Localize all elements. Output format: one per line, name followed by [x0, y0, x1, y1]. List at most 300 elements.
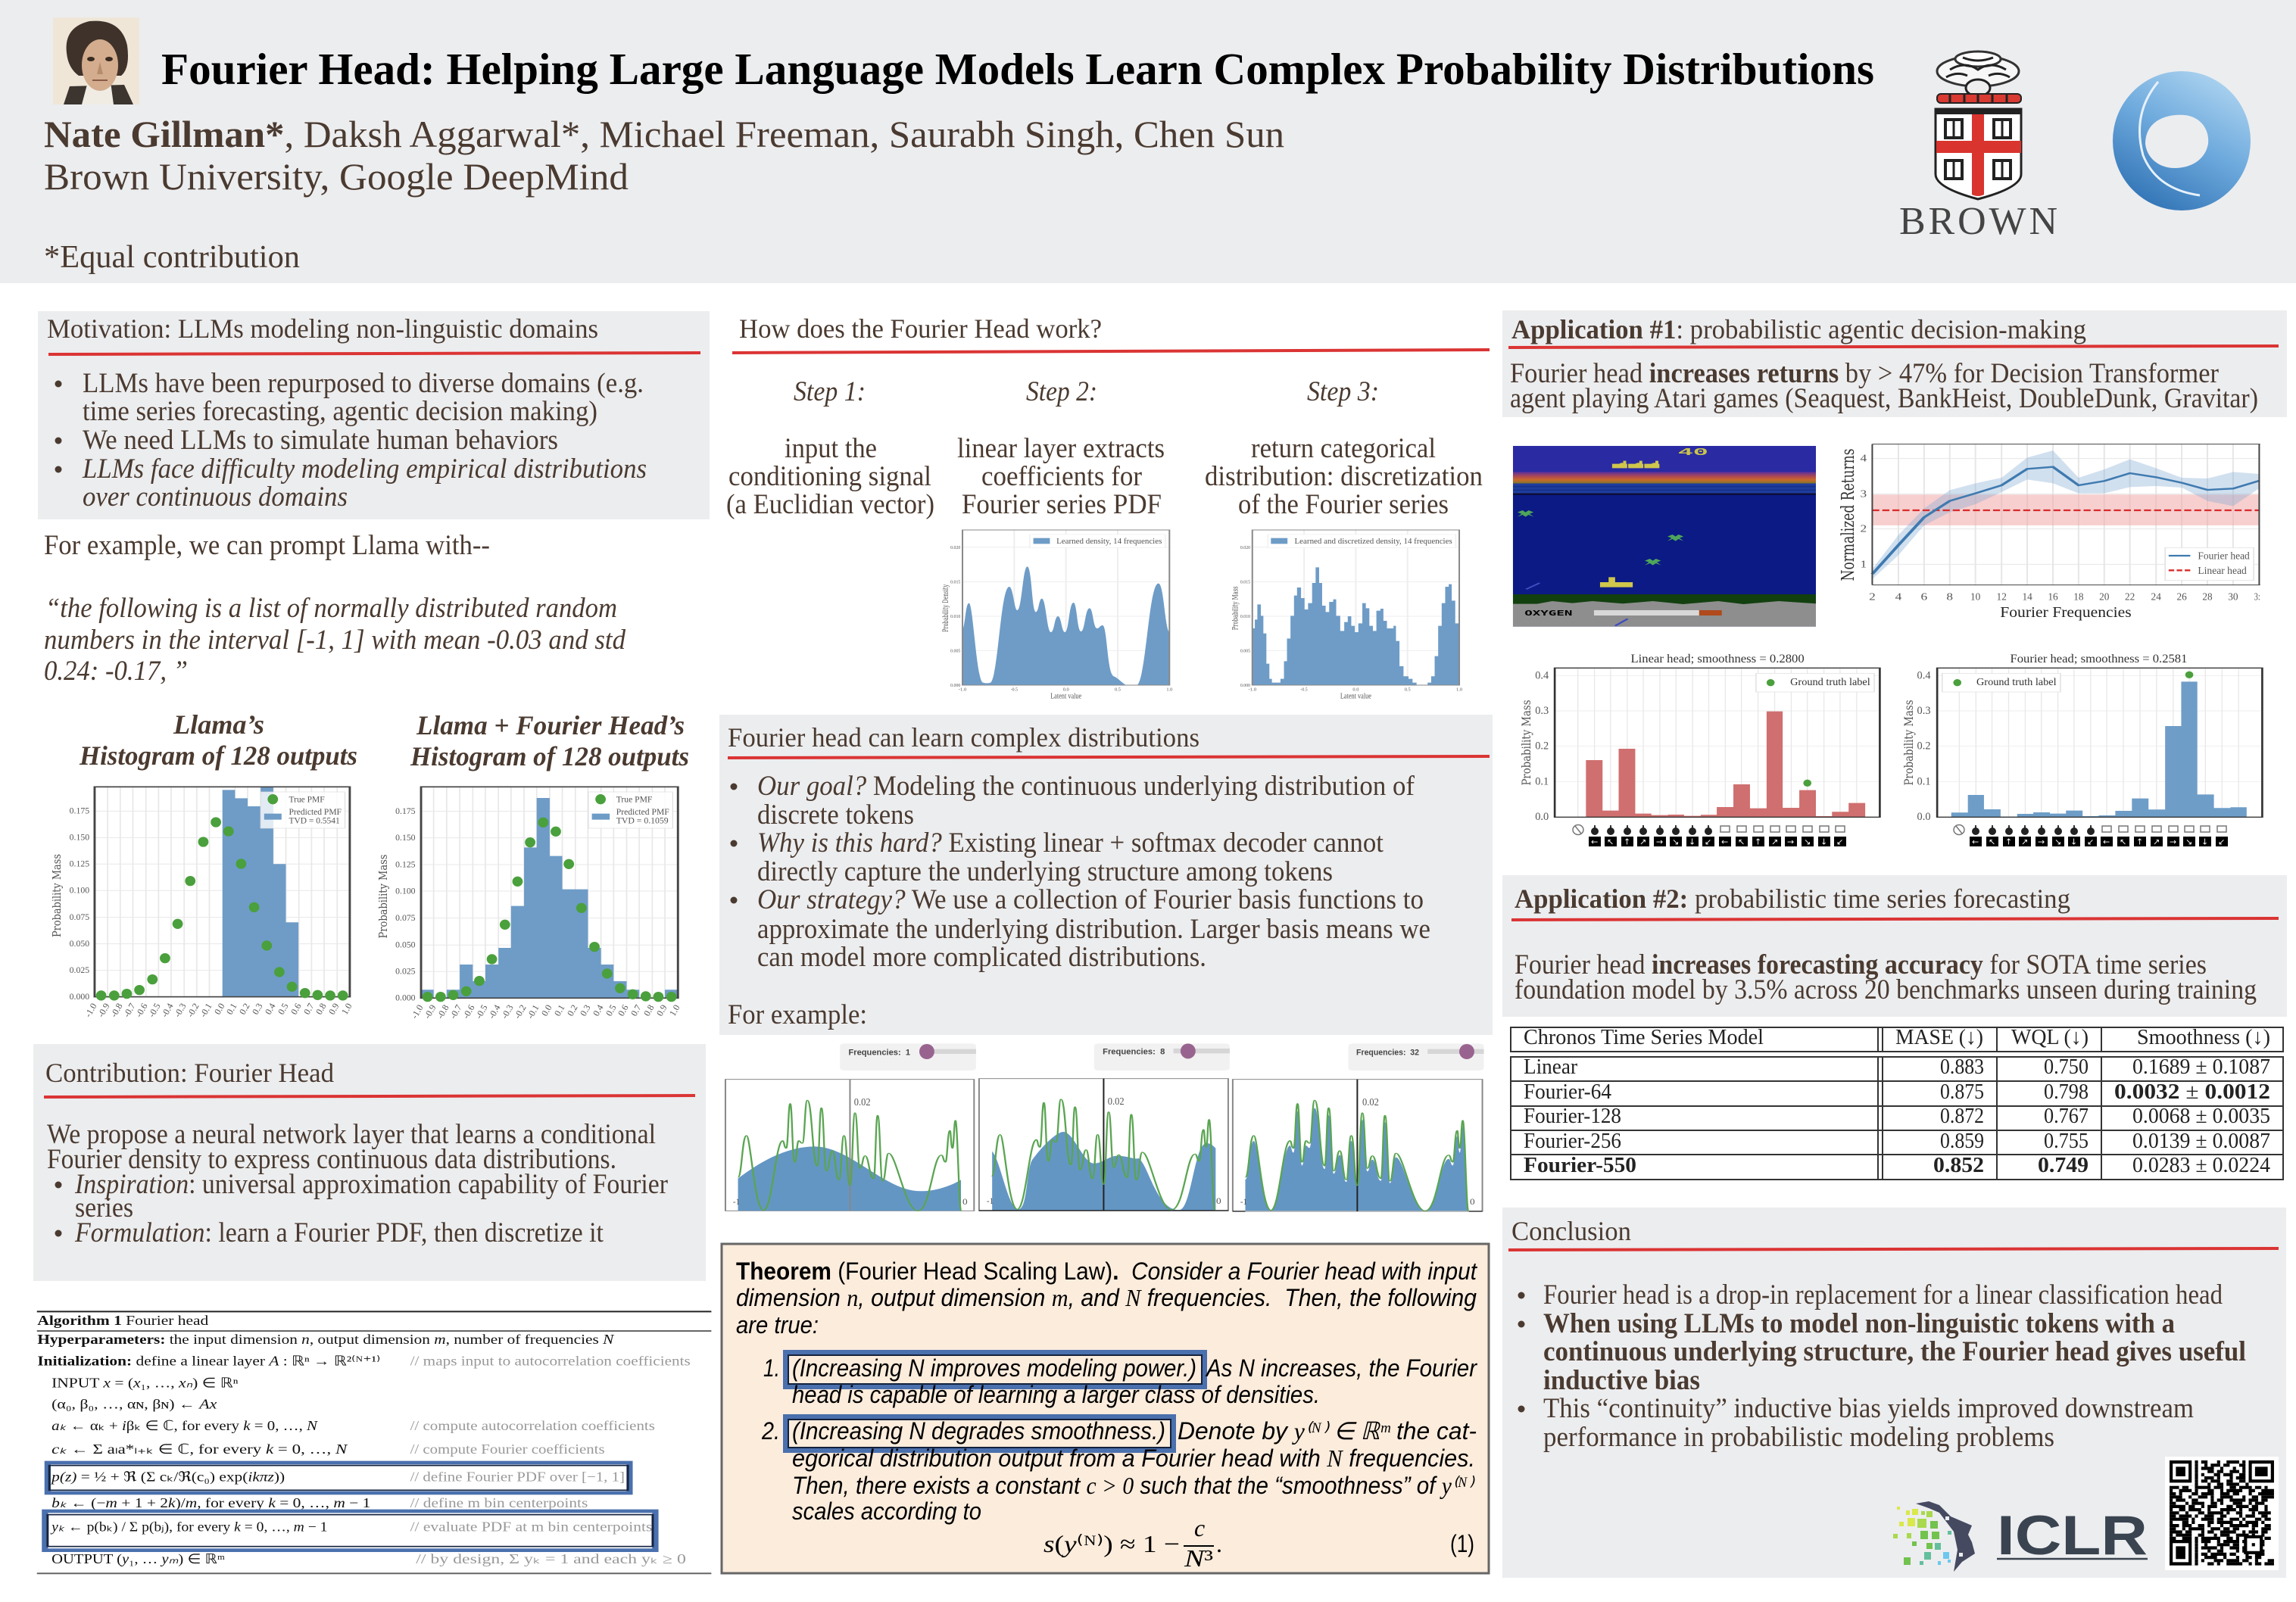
application 2 text	[1515, 949, 2257, 1005]
chart: linear head action distribution: 0.1	[1535, 775, 1549, 787]
image: Atari Seaquest game frame: OXYGEN	[1524, 608, 1572, 618]
chart: learned and discretized density: -0.5	[1300, 687, 1308, 693]
chart: Llama histogram: 0.1	[224, 1001, 239, 1016]
panel: algorithm 1 pseudocode: cₖ ← Σ aₗa*ₗ₊ₖ ∈ ℂ, for every k = 0, …, N	[51, 1441, 348, 1457]
chart: Llama histogram: 0.075	[70, 912, 89, 922]
affiliations: Brown University, Google DeepMind	[44, 155, 629, 198]
text: step 3: Step 3:	[1307, 376, 1379, 407]
contribution text: Fourier density to express continuous data distributions.	[47, 1144, 616, 1175]
chart: normalized returns vs Fourier frequencies: 20	[2099, 591, 2109, 603]
heading: application 2: Application #2: probabilistic time series forecasting	[1515, 884, 2070, 914]
chart: learned and discretized density: 0.015	[1240, 580, 1250, 585]
heading: Llama histogram	[79, 709, 357, 771]
table: Chronos time series results: 0.767	[2044, 1104, 2089, 1128]
chart: frequencies = 1: -1	[733, 1197, 740, 1207]
complex distribution bullets	[730, 771, 1430, 973]
chart: Llama + Fourier Head histogram: 1.0	[667, 1002, 682, 1018]
icon: Google DeepMind swirl logo	[2113, 71, 2251, 210]
text: Llama prompt example	[44, 530, 625, 687]
theorem item 2	[761, 1417, 1477, 1525]
text: step 2	[957, 376, 1165, 520]
chart: normalized returns vs Fourier frequencies: 2	[1869, 591, 1876, 603]
chart: normalized returns vs Fourier frequencies: 14	[2022, 591, 2032, 603]
chart: learned density: 0.000	[950, 684, 961, 688]
panel: algorithm 1 pseudocode: INPUT x = (x₁, …, xₙ) ∈ ℝⁿ	[51, 1376, 239, 1391]
equation: smoothness scaling	[1043, 1514, 1474, 1572]
table: Chronos time series results: Smoothness (↓)	[2137, 1025, 2270, 1049]
title: Fourier Head: Helping Large Language Models Learn Complex Probability Distributions	[161, 44, 1874, 94]
chart: normalized returns vs Fourier frequencies: 24	[2151, 591, 2161, 603]
chart: linear head action distribution	[1519, 653, 1880, 846]
conclusion bullets: inductive bias	[1543, 1365, 1700, 1396]
text: step 2: Step 2:	[1026, 376, 1097, 407]
icon: ICLR logo	[1893, 1501, 2148, 1572]
chart: normalized returns vs Fourier frequencies: Normalized Returns	[1839, 448, 1858, 581]
chart: normalized returns vs Fourier frequencies: 26	[2176, 591, 2187, 603]
heading: Llama + Fourier Head histogram	[410, 710, 689, 771]
chart: Llama histogram: 0.100	[70, 885, 89, 895]
chart: linear head action distribution: ←↖↑↗→↘↓↙←↖↑↗→↘↓↙	[1591, 837, 1843, 846]
icon: portrait of Fourier	[53, 17, 139, 104]
panel: conclusion	[1502, 1208, 2286, 1578]
chart: learned density: 0.5	[1115, 687, 1121, 693]
chart: Llama histogram: -0.9	[95, 1001, 112, 1019]
equal contribution note: *Equal contribution	[44, 240, 300, 275]
chart: Llama histogram: True PMF	[289, 794, 325, 804]
chart: learned and discretized density: 0.005	[1240, 649, 1250, 653]
panel: algorithm 1 pseudocode: Algorithm 1 Fourier head	[37, 1313, 208, 1328]
motivation bullets: over continuous domains	[83, 482, 348, 513]
chart: linear head action distribution: Ground truth label	[1790, 675, 1870, 687]
chart: Llama + Fourier Head histogram: -0.4	[486, 1002, 503, 1021]
chart: linear head action distribution: 0.2	[1535, 740, 1549, 752]
chart: Llama + Fourier Head histogram: 0.4	[591, 1002, 606, 1018]
contribution text: Formulation: learn a Fourier PDF, then discretize it	[74, 1217, 604, 1248]
chart: Llama histogram: 0.7	[301, 1001, 317, 1016]
chart: learned density: -1.0	[959, 687, 967, 693]
panel: algorithm 1 pseudocode: bₖ ← (−m + 1 + 2k)/m, for every k = 0, …, m − 1	[51, 1495, 370, 1510]
image: Atari Seaquest game frame: 40	[1678, 447, 1708, 458]
table: Chronos time series results: 0.852	[1933, 1153, 1984, 1177]
chart: learned density: -0.5	[1011, 687, 1018, 693]
chart: frequencies = 32: Frequencies: 32	[1356, 1047, 1419, 1057]
chart: Llama + Fourier Head histogram: 0.9	[654, 1002, 669, 1018]
chart: normalized returns vs Fourier frequencies: 10	[1970, 591, 1980, 603]
chart: frequencies = 8: 0.02	[1108, 1096, 1125, 1107]
text: 3:	[2254, 591, 2260, 603]
chart: Llama histogram: 0.175	[70, 806, 89, 815]
chart: Llama + Fourier Head histogram: 0.7	[629, 1002, 644, 1018]
icon: ICLR logo: ICLR	[1997, 1505, 2148, 1566]
theorem item 1	[763, 1352, 1477, 1408]
chart: Llama + Fourier Head histogram: 0.6	[616, 1002, 631, 1018]
equation: smoothness scaling: N³	[1184, 1544, 1213, 1572]
callout: Fourier PDF highlight	[48, 1463, 629, 1493]
chart: Llama histogram: 0.000	[70, 991, 89, 1002]
panel: algorithm 1 pseudocode: OUTPUT (y₁, … yₘ) ∈ ℝᵐ	[51, 1551, 225, 1566]
chart: learned and discretized density: 0.020	[1240, 546, 1250, 550]
theorem item 2: Denote by y⁽ᴺ⁾ ∈ ℝᵐ the cat-	[1178, 1417, 1477, 1445]
heading: how does the Fourier Head work: How does the Fourier Head work?	[739, 313, 1102, 344]
chart: learned and discretized density: 0.000	[1240, 684, 1250, 688]
table: Chronos time series results: 0.749	[2038, 1153, 2089, 1177]
chart: Fourier head action distribution: Probability Mass	[1901, 700, 1916, 786]
header band	[0, 0, 2296, 283]
chart: normalized returns vs Fourier frequencies: 22	[2125, 591, 2135, 603]
panel: algorithm 1 pseudocode: aₖ ← αₖ + iβₖ ∈ ℂ, for every k = 0, …, N	[51, 1418, 318, 1433]
chart: Llama + Fourier Head histogram: -0.3	[499, 1002, 516, 1021]
chart: linear head action distribution: 0.4	[1535, 669, 1549, 681]
heading: how does the Fourier Head work	[732, 313, 1490, 353]
chart: frequencies = 8: 0	[1216, 1196, 1221, 1206]
panel: application 1	[1502, 310, 2287, 417]
complex distribution bullets: approximate the underlying distribution. Larger basis means we	[757, 914, 1430, 945]
panel: algorithm 1 pseudocode: // define m bin centerpoints	[410, 1495, 588, 1510]
table: Chronos time series results: 0.0068 ± 0.0035	[2132, 1104, 2270, 1128]
chart: Llama + Fourier Head histogram: 0.025	[395, 966, 416, 976]
image: Atari Seaquest game frame	[1513, 446, 1816, 627]
chart: frequencies = 1: 0.02	[854, 1096, 871, 1108]
chart: Llama + Fourier Head histogram: -0.2	[512, 1002, 529, 1021]
chart: learned density: 0.020	[950, 546, 961, 550]
motivation bullets: time series forecasting, agentic decision making)	[83, 396, 597, 427]
chart: Llama + Fourier Head histogram: -0.1	[525, 1002, 541, 1021]
table: Chronos time series results: 0.883	[1940, 1055, 1984, 1079]
callout: PDF evaluation highlight: yₖ ← p(bₖ) / Σ p(bⱼ), for every k = 0, …, m − 1	[50, 1519, 327, 1535]
conclusion bullets: When using LLMs to model non-linguistic tokens with a	[1543, 1308, 2175, 1339]
chart: frequencies = 1: Frequencies: 1	[848, 1047, 910, 1057]
table: Chronos time series results: Linear	[1524, 1055, 1577, 1079]
chart: Llama histogram: 0.8	[314, 1001, 329, 1016]
chart: learned density: Latent value	[1050, 691, 1081, 700]
complex distribution bullets: Our goal? Modeling the continuous underlying distribution of	[757, 771, 1415, 802]
chart: normalized returns vs Fourier frequencies: 30	[2228, 591, 2238, 603]
text: Llama prompt example: “the following is a list of normally distributed random	[45, 593, 617, 624]
text: step 2: Fourier series PDF	[962, 489, 1162, 520]
chart: Llama + Fourier Head histogram: 0.100	[395, 886, 416, 896]
equation: smoothness scaling: .	[1216, 1530, 1222, 1557]
chart: learned and discretized density: 0.0	[1352, 687, 1359, 693]
chart: learned and discretized density: 1.0	[1456, 687, 1462, 693]
complex distribution bullets: Why is this hard? Existing linear + softmax decoder cannot	[757, 827, 1384, 859]
chart: Fourier head action distribution	[1901, 653, 2262, 846]
chart: Fourier head action distribution: Ground truth label	[1976, 675, 2057, 687]
chart: frequencies = 32: 0	[1470, 1197, 1475, 1207]
text: step 2: linear layer extracts	[957, 433, 1165, 464]
chart: linear head action distribution: Linear head; smoothness = 0.2800	[1630, 653, 1805, 665]
theorem item 2: egorical distribution output from a Fourier head with N frequencies.	[792, 1445, 1475, 1472]
chart: learned density	[941, 530, 1172, 700]
text: step 3: distribution: discretization	[1205, 461, 1483, 492]
theorem item 1: As N increases, the Fourier	[1205, 1354, 1477, 1382]
chart: learned density: 0.015	[950, 580, 961, 585]
table: Chronos time series results: 0.1689 ± 0.1087	[2132, 1055, 2270, 1079]
chart: normalized returns vs Fourier frequencies: Linear head	[2198, 564, 2247, 576]
chart: Llama + Fourier Head histogram: True PMF	[616, 794, 652, 804]
conclusion bullets: Fourier head is a drop-in replacement for a linear classification head	[1543, 1279, 2223, 1311]
chart: normalized returns vs Fourier frequencies: 4	[1860, 452, 1867, 464]
chart: normalized returns vs Fourier frequencies: 12	[1997, 591, 2007, 603]
chart: Llama histogram: -0.5	[146, 1001, 163, 1019]
table: Chronos time series results: 0.750	[2044, 1055, 2089, 1079]
conclusion bullets: performance in probabilistic modeling problems	[1543, 1422, 2054, 1453]
chart: normalized returns vs Fourier frequencies: 8	[1946, 591, 1953, 603]
heading: motivation: Motivation: LLMs modeling non-linguistic domains	[47, 313, 598, 344]
chart: linear head action distribution: 0.0	[1535, 810, 1549, 823]
equation: smoothness scaling: s(y⁽ᴺ⁾) ≈ 1 −	[1043, 1530, 1180, 1557]
complex distribution bullets: Our strategy? We use a collection of Fourier basis functions to	[757, 884, 1424, 915]
chart: Llama histogram: 0.4	[263, 1001, 278, 1016]
complex distribution bullets: directly capture the underlying structure among tokens	[757, 856, 1333, 887]
chart: normalized returns vs Fourier frequencies: 2	[1860, 522, 1867, 535]
icon: Brown University logo	[1899, 51, 2057, 243]
chart: frequencies = 8: Frequencies: 8	[1103, 1047, 1165, 1056]
heading: complex distributions: Fourier head can learn complex distributions	[728, 722, 1199, 753]
text: step 3: return categorical	[1251, 433, 1436, 464]
chart: Llama + Fourier Head histogram: Predicted PMF	[616, 806, 669, 817]
chart: Llama + Fourier Head histogram: Probability Mass	[376, 854, 390, 939]
chart: normalized returns vs Fourier frequencies	[1839, 444, 2260, 620]
icon: Brown University logo: BROWN	[1899, 200, 2057, 243]
callout: Fourier PDF highlight: // define Fourier PDF over [−1, 1]	[410, 1470, 625, 1485]
chart: frequencies = 8: -1	[987, 1196, 994, 1206]
application 1 text	[1510, 358, 2258, 414]
chart: Llama + Fourier Head histogram: -0.8	[435, 1002, 451, 1021]
chart: Llama histogram: -0.4	[159, 1001, 176, 1019]
panel: algorithm 1 pseudocode: Hyperparameters: the input dimension n, output dimension m, number of frequencies N	[37, 1332, 615, 1347]
text: step 3: of the Fourier series	[1238, 489, 1449, 520]
conclusion bullets	[1518, 1279, 2246, 1453]
chart: linear head action distribution: Probability Mass	[1519, 700, 1533, 786]
contribution text: series	[75, 1192, 133, 1223]
heading: Llama + Fourier Head histogram: Llama + Fourier Head’s	[416, 710, 685, 740]
table: Chronos time series results: 0.0032 ± 0.0012	[2114, 1080, 2270, 1104]
chart: linear head action distribution: 0.3	[1535, 704, 1549, 717]
chart: Llama histogram: -0.1	[198, 1001, 214, 1019]
theorem item 2: 2.	[761, 1417, 780, 1445]
icon: QR code	[2165, 1457, 2279, 1570]
chart: Llama histogram: 0.5	[276, 1001, 291, 1016]
chart: frequencies = 8	[979, 1043, 1230, 1211]
chart: Llama histogram: Probability Mass	[50, 854, 64, 937]
table: Chronos time series results: Chronos Time Series Model	[1524, 1025, 1764, 1049]
callout: PDF evaluation highlight	[45, 1511, 655, 1551]
authors: Nate Gillman*, Daksh Aggarwal*, Michael Freeman, Saurabh Singh, Chen Sun	[44, 113, 1284, 155]
heading: conclusion: Conclusion	[1511, 1216, 1631, 1246]
chart: Llama histogram: 0.025	[70, 965, 89, 975]
chart: normalized returns vs Fourier frequencies: 16	[2048, 591, 2058, 603]
chart: Llama + Fourier Head histogram: -0.7	[448, 1002, 464, 1021]
application 1 text: Fourier head increases returns by > 47% for Decision Transformer	[1510, 358, 2219, 389]
chart: Llama + Fourier Head histogram	[376, 787, 682, 1021]
table: Chronos time series results: 0.872	[1940, 1104, 1984, 1128]
complex distribution bullets: can model more complicated distributions.	[757, 942, 1206, 973]
chart: learned and discretized density: Probability Mass	[1231, 586, 1240, 630]
text: step 1: input the	[785, 433, 877, 464]
chart: Fourier head action distribution: 0.2	[1917, 740, 1931, 752]
table: Chronos time series results: Fourier-256	[1524, 1129, 1621, 1153]
text: step 1: Step 1:	[794, 376, 866, 407]
chart: learned density: 0.010	[950, 615, 961, 619]
text: step 1	[726, 376, 934, 520]
table: Chronos time series results: WQL (↓)	[2011, 1025, 2089, 1049]
contribution text: We propose a neural network layer that learns a conditional	[47, 1119, 656, 1150]
chart: normalized returns vs Fourier frequencies: 28	[2202, 591, 2213, 603]
chart: Fourier head action distribution: ←↖↑↗→↘↓↙←↖↑↗→↘↓↙	[1972, 837, 2225, 846]
chart: Llama + Fourier Head histogram: 0.175	[395, 806, 416, 816]
table: Chronos time series results: 0.0283 ± 0.0224	[2132, 1153, 2270, 1177]
chart: learned and discretized density: Latent value	[1340, 691, 1371, 700]
chart: Llama histogram: -0.2	[185, 1001, 201, 1019]
table: Chronos time series results: 0.798	[2044, 1080, 2089, 1104]
chart: Llama + Fourier Head histogram: -0.5	[473, 1002, 490, 1021]
chart: Llama + Fourier Head histogram: 0.000	[395, 993, 416, 1002]
table: Chronos time series results: 0.755	[2044, 1129, 2089, 1153]
chart: frequencies = 32: -1	[1240, 1197, 1247, 1207]
text: step 1: (a Euclidian vector)	[726, 489, 934, 520]
text: step 3	[1205, 376, 1483, 520]
chart: Fourier head action distribution: 0.0	[1917, 810, 1931, 823]
chart: Fourier head action distribution: 0.1	[1917, 775, 1931, 787]
table: Chronos time series results: 0.875	[1940, 1080, 1984, 1104]
text: Llama prompt example: For example, we can prompt Llama with--	[44, 530, 490, 561]
chart: Llama + Fourier Head histogram: 0.3	[578, 1002, 593, 1018]
chart: learned density: 0.005	[950, 649, 961, 653]
chart: Llama + Fourier Head histogram: 0.8	[641, 1002, 657, 1018]
chart: learned and discretized density: 0.5	[1405, 687, 1411, 693]
chart: Llama histogram: -0.3	[172, 1001, 189, 1019]
heading: application 1: Application #1: probabilistic agentic decision-making	[1511, 314, 2086, 344]
conclusion bullets: continuous underlying structure, the Fourier head gives useful	[1543, 1336, 2246, 1367]
motivation bullets	[55, 368, 647, 513]
panel: algorithm 1 pseudocode: Initialization: define a linear layer A : ℝⁿ → ℝ²⁽ᴺ⁺¹⁾	[37, 1353, 380, 1369]
chart: Llama + Fourier Head histogram: 0.125	[395, 859, 416, 869]
equation: smoothness scaling: (1)	[1450, 1530, 1474, 1557]
chart: Llama histogram: 0.150	[70, 832, 89, 842]
chart: frequencies = 1	[725, 1043, 976, 1211]
chart: Llama histogram: -0.7	[121, 1001, 138, 1019]
chart: Llama histogram: 0.125	[70, 859, 89, 868]
chart: learned density: Probability Density	[941, 584, 950, 632]
chart: Llama histogram: Predicted PMF	[289, 806, 342, 817]
motivation bullets: LLMs have been repurposed to diverse domains (e.g.	[83, 368, 644, 399]
text: step 1: conditioning signal	[728, 461, 931, 492]
conclusion bullets: This “continuity” inductive bias yields improved downstream	[1543, 1393, 2194, 1424]
chart: normalized returns vs Fourier frequencies: Fourier Frequencies	[2000, 603, 2132, 620]
complex distribution bullets: discrete tokens	[757, 799, 914, 831]
chart: Llama + Fourier Head histogram: TVD = 0.1059	[616, 815, 669, 825]
chart: Llama + Fourier Head histogram: 0.0	[539, 1002, 554, 1018]
chart: frequencies = 1: 0	[962, 1197, 968, 1207]
chart: normalized returns vs Fourier frequencies: 4	[1895, 591, 1901, 603]
chart: Llama histogram: 0.3	[250, 1001, 265, 1016]
chart: Llama histogram: -1.0	[83, 1001, 99, 1019]
panel: motivation	[38, 311, 710, 519]
text: Llama prompt example: 0.24: -0.17, ”	[44, 656, 188, 687]
chart: Llama histogram: TVD = 0.5541	[289, 815, 340, 825]
theorem item 2: (Increasing N degrades smoothness.)	[792, 1417, 1165, 1445]
panel: theorem	[722, 1244, 1489, 1573]
chart: frequencies = 32: 0.02	[1362, 1096, 1379, 1108]
table: Chronos time series results: Fourier-128	[1524, 1104, 1621, 1128]
theorem item 1: 1.	[763, 1354, 780, 1382]
theorem item 2: scales according to	[792, 1498, 981, 1525]
heading: Llama histogram: Histogram of 128 outputs	[79, 740, 357, 771]
panel: Fourier head can learn complex distributions	[719, 715, 1493, 1035]
chart: Llama + Fourier Head histogram: 0.5	[604, 1002, 619, 1018]
table: Chronos time series results: MASE (↓)	[1895, 1025, 1983, 1049]
contribution text: Inspiration: universal approximation capability of Fourier	[74, 1169, 668, 1200]
chart: Llama histogram: -0.6	[133, 1001, 150, 1019]
panel: algorithm 1 pseudocode: // compute autocorrelation coefficients	[410, 1418, 655, 1433]
chart: Llama histogram	[50, 787, 354, 1019]
theorem item 1: head is capable of learning a larger class of densities.	[792, 1381, 1320, 1408]
panel: algorithm 1 pseudocode	[37, 1311, 711, 1573]
chart: Llama + Fourier Head histogram: 0.050	[395, 940, 416, 949]
chart: Llama + Fourier Head histogram: 0.2	[565, 1002, 580, 1018]
heading: Llama histogram: Llama’s	[173, 709, 264, 740]
chart: Llama histogram: 0.050	[70, 938, 89, 949]
table: Chronos time series results	[1511, 1025, 2283, 1180]
chart: learned density: 1.0	[1166, 687, 1172, 693]
motivation bullets: We need LLMs to simulate human behaviors	[83, 425, 558, 456]
chart: learned density: 0.0	[1063, 687, 1069, 693]
text: for example: For example:	[728, 999, 867, 1030]
chart: Llama histogram: 0.2	[237, 1001, 252, 1016]
chart: learned and discretized density: 0.010	[1240, 615, 1250, 619]
chart: normalized returns vs Fourier frequencies: 1	[1860, 558, 1867, 569]
chart: Llama + Fourier Head histogram: -0.6	[460, 1002, 477, 1021]
heading: Llama + Fourier Head histogram: Histogram of 128 outputs	[410, 741, 689, 771]
callout: Fourier PDF highlight: p(z) = ½ + ℜ (Σ cₖ/ℜ(c₀) exp(ikπz))	[50, 1470, 285, 1485]
chart: learned density: Learned density, 14 frequencies	[1056, 536, 1162, 546]
panel: algorithm 1 pseudocode: // by design, Σ yₖ = 1 and each yₖ ≥ 0	[416, 1551, 686, 1566]
table: Chronos time series results: Fourier-64	[1524, 1080, 1611, 1104]
chart: Fourier head action distribution: 0.4	[1917, 669, 1931, 681]
chart: normalized returns vs Fourier frequencies: 6	[1921, 591, 1927, 603]
contribution text	[47, 1119, 668, 1248]
chart: Llama + Fourier Head histogram: -0.9	[422, 1002, 438, 1021]
application 2 text: Fourier head increases forecasting accuracy for SOTA time series	[1515, 949, 2207, 980]
chart: Fourier head action distribution: 0.3	[1917, 704, 1931, 717]
equation: smoothness scaling: c	[1194, 1514, 1205, 1541]
theorem item 1: (Increasing N improves modeling power.)	[792, 1354, 1196, 1382]
panel: algorithm 1 pseudocode: // maps input to autocorrelation coefficients	[410, 1353, 691, 1369]
panel: contribution	[33, 1044, 706, 1281]
chart: Llama + Fourier Head histogram: 0.075	[395, 912, 416, 923]
callout: PDF evaluation highlight: // evaluate PDF at m bin centerpoints	[410, 1519, 652, 1535]
chart: normalized returns vs Fourier frequencies: 3	[1860, 488, 1867, 499]
chart: learned and discretized density	[1231, 530, 1462, 700]
table: Chronos time series results: 0.0139 ± 0.0087	[2132, 1129, 2270, 1153]
panel: algorithm 1 pseudocode: // compute Fourier coefficients	[410, 1441, 605, 1457]
chart: learned and discretized density: Learned and discretized density, 14 frequencies	[1294, 536, 1452, 546]
panel: theorem: dimension n, output dimension m, and N frequencies. Then, the following	[736, 1284, 1477, 1311]
chart: frequencies = 32	[1233, 1043, 1484, 1211]
text: step 2: coefficients for	[981, 461, 1142, 492]
panel: theorem: Theorem (Fourier Head Scaling Law). Consider a Fourier head with input	[736, 1258, 1477, 1285]
chart: Llama histogram: -0.8	[108, 1001, 125, 1019]
chart: Llama histogram: 0.9	[326, 1001, 342, 1016]
chart: Llama + Fourier Head histogram: -1.0	[409, 1002, 426, 1021]
chart: Llama histogram: 0.0	[212, 1001, 227, 1016]
panel: algorithm 1 pseudocode: (α₀, β₀, …, αɴ, βɴ) ← Ax	[51, 1397, 217, 1412]
table: Chronos time series results: 0.859	[1940, 1129, 1984, 1153]
chart: Llama histogram: 0.6	[289, 1001, 304, 1016]
motivation bullets: LLMs face difficulty modeling empirical distributions	[82, 453, 647, 485]
theorem item 2: Then, there exists a constant c > 0 such that the “smoothness” of y⁽ᴺ⁾	[792, 1472, 1475, 1499]
text: Llama prompt example: numbers in the interval [-1, 1] with mean -0.03 and std	[44, 625, 625, 656]
